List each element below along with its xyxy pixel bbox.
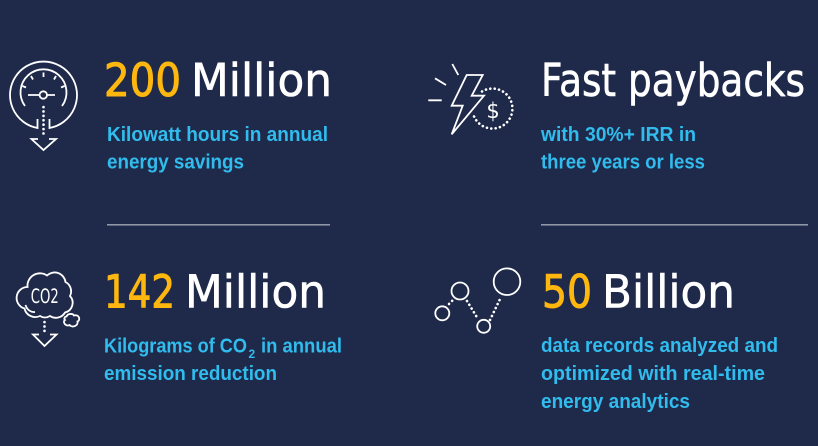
panel: data records	[435, 266, 778, 413]
text: with IRR: with 30%+ IRR in	[540, 123, 696, 146]
text: emission reduction: emission reduction	[104, 362, 277, 385]
text: kilograms of CO2	[104, 334, 342, 361]
text: energy savings: energy savings	[107, 150, 244, 174]
heading: 142: 142	[104, 266, 175, 318]
heading: Billion: Billion	[602, 266, 735, 318]
icon: CO2 cloud with down arrow	[17, 272, 79, 346]
panel: fast paybacks	[428, 54, 805, 174]
text: kilowatt hours: Kilowatt hours in annual	[107, 123, 328, 146]
heading: Million: Million	[191, 54, 332, 107]
text: kilograms of CO2: in annual	[261, 334, 342, 358]
icon: gauge with down arrow	[10, 62, 77, 150]
heading: 200: 200	[104, 54, 181, 107]
divider left	[107, 224, 330, 226]
heading: 50: 50	[542, 266, 592, 318]
icon: CO2 cloud with down arrow: CO2	[31, 285, 59, 308]
divider right	[541, 224, 808, 226]
icon: lightning bolt and dollar: $	[486, 99, 500, 123]
panel: emission reduction	[17, 266, 342, 385]
text: kilograms of CO2: 2	[248, 347, 256, 361]
text: energy analytics: energy analytics	[541, 390, 690, 413]
text: kilograms of CO2: Kilograms of CO	[104, 334, 247, 358]
text: optimized: optimized with real-time	[541, 362, 765, 385]
panel: energy savings	[10, 54, 332, 174]
text: three years: three years or less	[541, 150, 705, 174]
icon: dotted line chart	[435, 268, 520, 333]
heading: Million: Million	[185, 266, 326, 318]
text: data records: data records analyzed and	[541, 334, 778, 357]
icon: lightning bolt and dollar	[428, 64, 512, 134]
